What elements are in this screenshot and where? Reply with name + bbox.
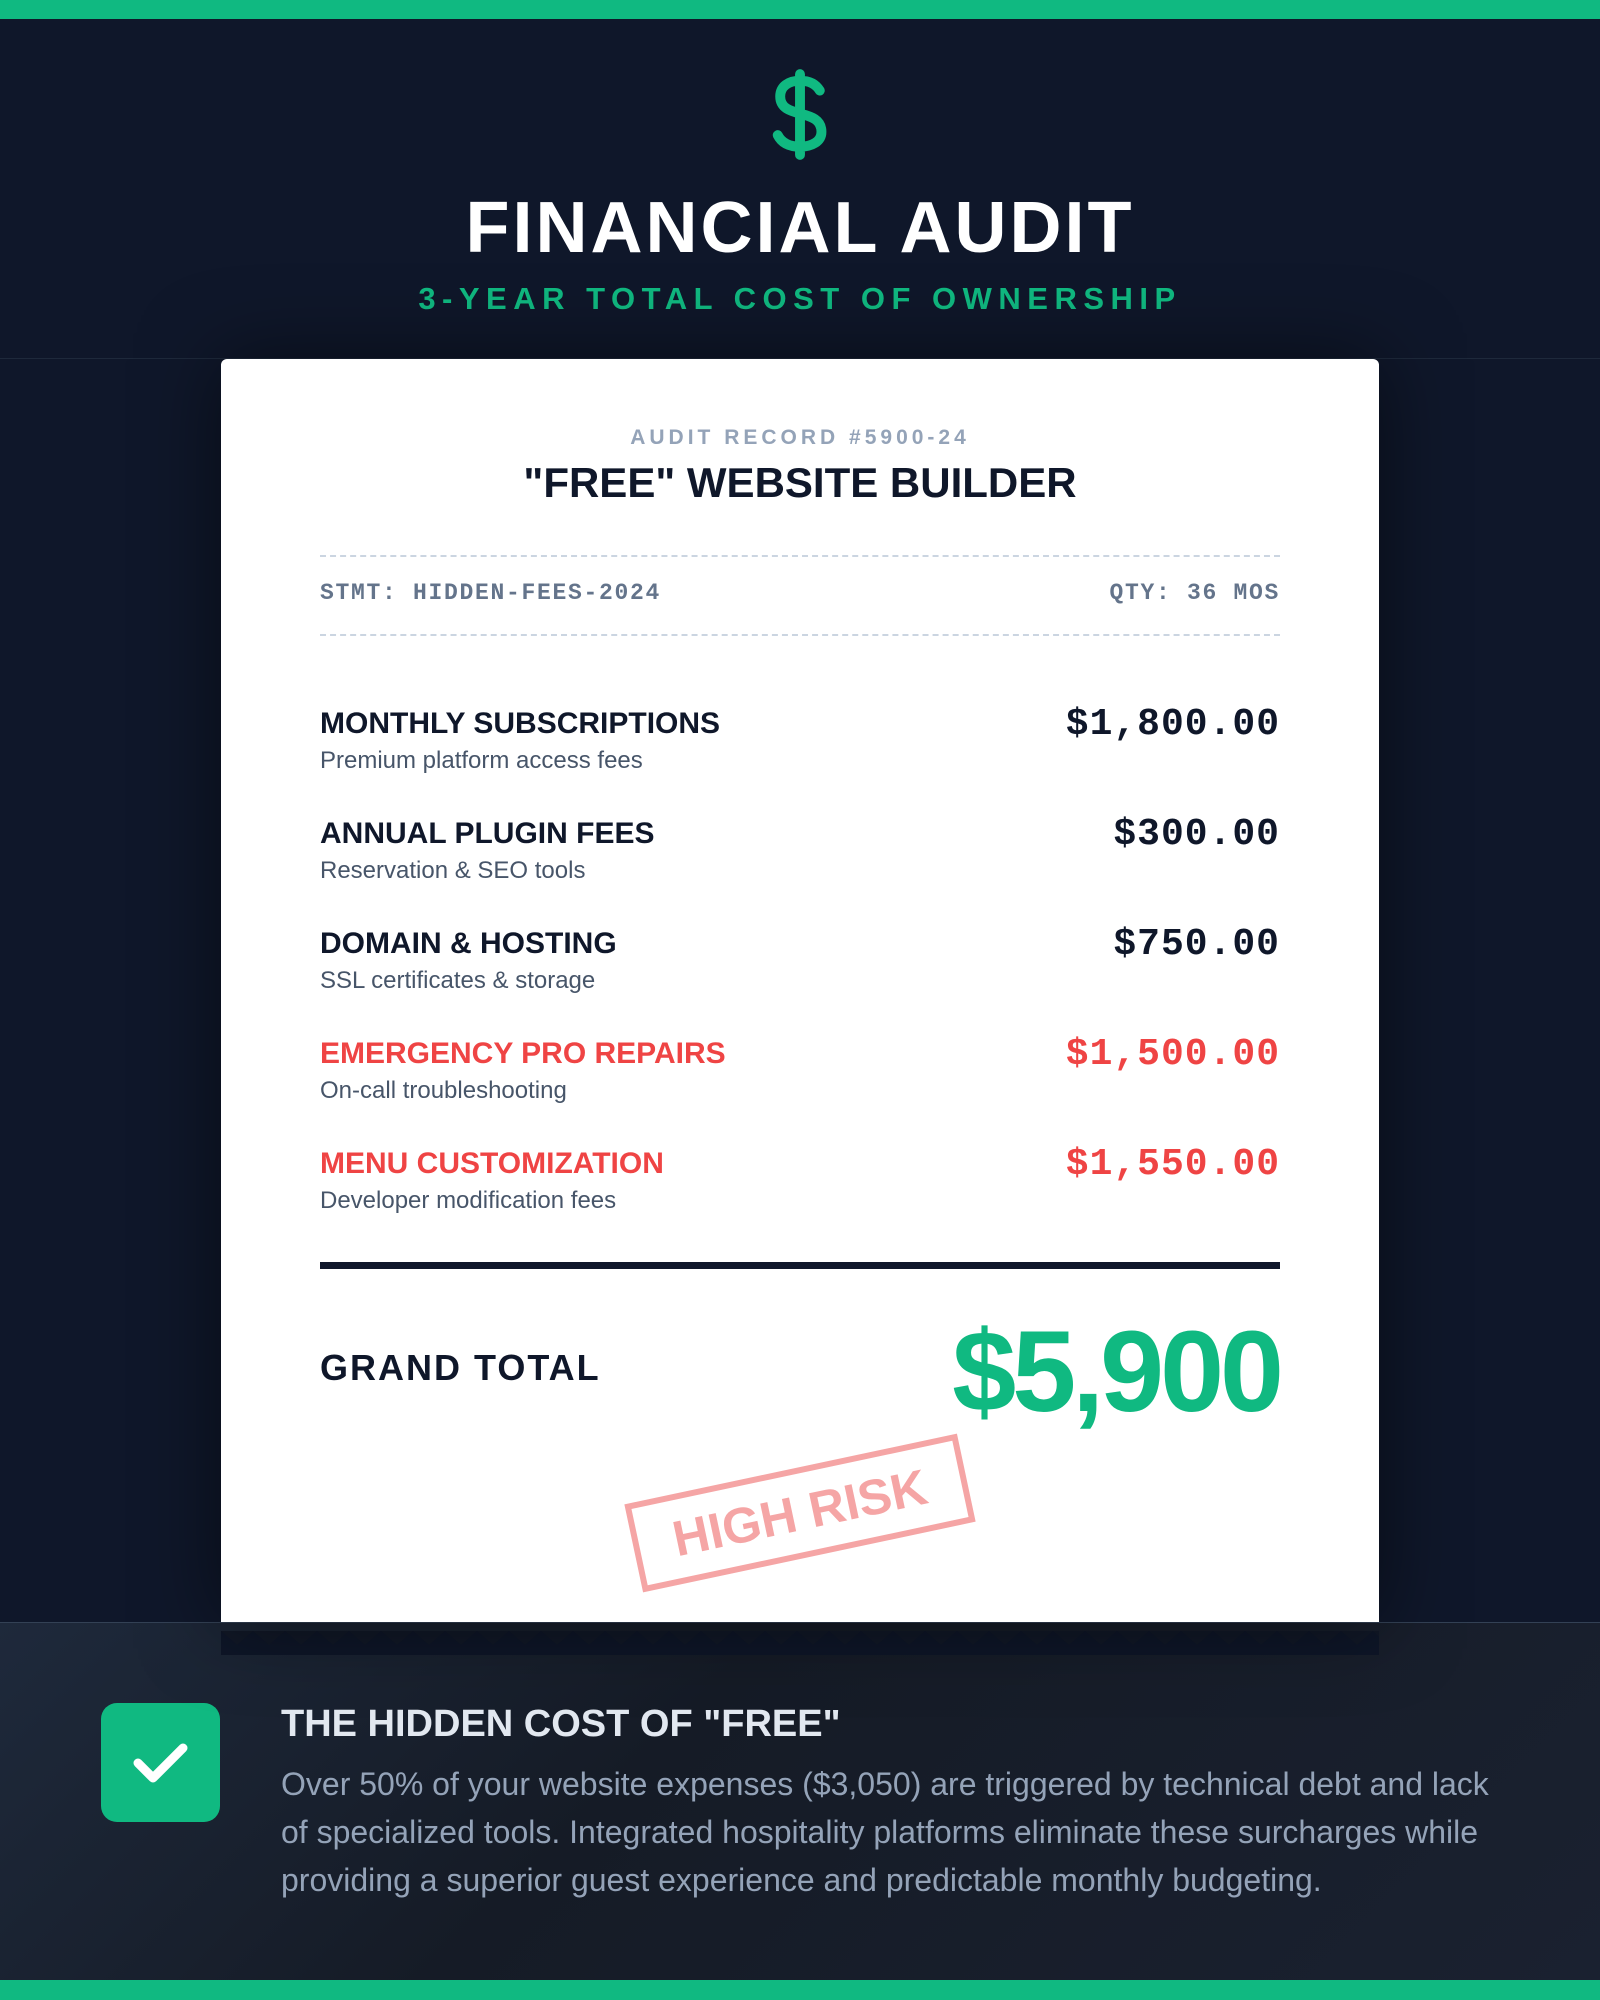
grand total amount: $5,900 xyxy=(952,1308,1280,1436)
item: subscriptions: $1,800.00 xyxy=(1066,703,1280,746)
zigzag card edge xyxy=(221,1631,1379,1655)
item: menu: MENU CUSTOMIZATION xyxy=(320,1147,664,1180)
item: menu xyxy=(320,1143,1280,1214)
stamp: high risk xyxy=(624,1434,976,1592)
card title: "FREE" WEBSITE BUILDER xyxy=(523,459,1077,506)
grand total label: GRAND TOTAL xyxy=(320,1347,601,1388)
item: plugins: Reservation & SEO tools xyxy=(320,857,585,884)
item: plugins xyxy=(320,813,1280,884)
icon: checkmark xyxy=(101,1703,220,1822)
item: plugins: ANNUAL PLUGIN FEES xyxy=(320,817,654,850)
item: subscriptions xyxy=(320,703,1280,774)
header xyxy=(0,19,1600,359)
subtitle: 3-YEAR TOTAL COST OF OWNERSHIP xyxy=(418,281,1182,316)
item: repairs: $1,500.00 xyxy=(1066,1033,1280,1076)
statement row: QTY: 36 MOS xyxy=(1109,580,1280,606)
statement row: STMT: HIDDEN-FEES-2024 xyxy=(320,580,661,606)
item: domain xyxy=(320,923,1280,994)
panel: receipt card xyxy=(221,359,1379,1622)
item: repairs: EMERGENCY PRO REPAIRS xyxy=(320,1037,726,1070)
item: plugins: $300.00 xyxy=(1113,813,1280,856)
title: FINANCIAL AUDIT xyxy=(466,188,1134,268)
statement row xyxy=(320,580,1280,606)
callout heading: THE HIDDEN COST OF "FREE" xyxy=(281,1703,841,1745)
item: repairs: On-call troubleshooting xyxy=(320,1077,567,1104)
callout text: Over 50% of your website expenses ($3,050) are triggered by technical debt and lack of specialized tools. Integrated hospitality platforms eliminate these surcharges while providing a superior guest experience and predictable monthly budgeting. xyxy=(281,1766,1489,1898)
item: subscriptions: Premium platform access fees xyxy=(320,747,643,774)
item: domain: DOMAIN & HOSTING xyxy=(320,927,617,960)
stamp: high risk: HIGH RISK xyxy=(668,1459,932,1567)
item: menu: Developer modification fees xyxy=(320,1187,616,1214)
item: repairs xyxy=(320,1033,1280,1104)
line items xyxy=(320,703,1280,1214)
record label: AUDIT RECORD #5900-24 xyxy=(630,426,970,449)
icon: dollar sign xyxy=(772,69,826,160)
bottom section xyxy=(0,1622,1600,1980)
item: domain: $750.00 xyxy=(1113,923,1280,966)
item: domain: SSL certificates & storage xyxy=(320,967,595,994)
item: subscriptions: MONTHLY SUBSCRIPTIONS xyxy=(320,707,720,740)
item: menu: $1,550.00 xyxy=(1066,1143,1280,1186)
